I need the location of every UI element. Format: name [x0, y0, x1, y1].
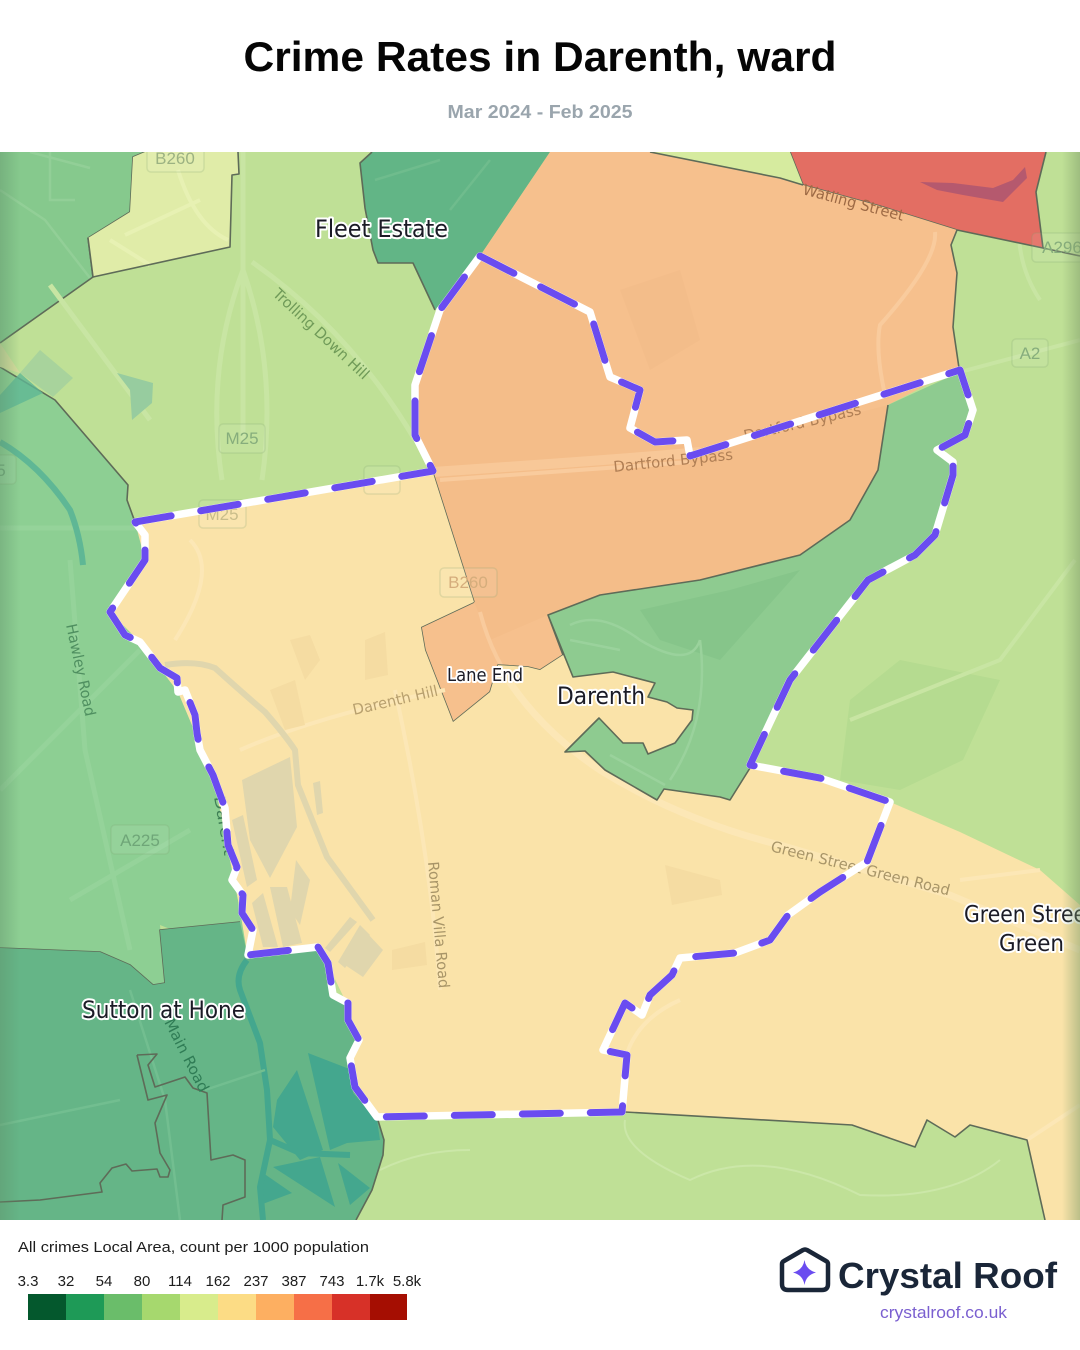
legend scale labels: 114 — [168, 1273, 192, 1290]
ward boundary: Darenth — [110, 256, 973, 1117]
road shields: M25 — [225, 429, 259, 448]
road names: Watling Street — [801, 180, 906, 225]
region: A2 corridor east — [840, 244, 1076, 790]
title: Crime Rates in Darenth, ward — [244, 33, 836, 80]
road names: Darenth Hill — [351, 682, 440, 719]
subtitle: date range: Mar 2024 - Feb 2025 — [448, 102, 632, 122]
logo: Crystal Roof — [782, 1250, 1058, 1322]
road shields: A2 — [1020, 344, 1040, 363]
road names: Dartford Bypass — [613, 446, 734, 476]
road shields: M25 — [205, 505, 239, 524]
legend scale labels: 1.7k — [356, 1273, 385, 1290]
region: southern green — [356, 1112, 1045, 1220]
road names: Roman Villa Road — [424, 861, 453, 989]
place labels: Fleet Estate — [315, 215, 448, 243]
place labels — [82, 215, 1080, 1024]
legend scale labels: 54 — [96, 1273, 112, 1290]
region: yellow Darenth main area — [110, 473, 1080, 1220]
legend — [18, 1239, 422, 1320]
road names: Trolling Down Hill — [269, 284, 373, 383]
website url: crystalroof.co.uk — [880, 1303, 1008, 1322]
road names: Darent — [210, 795, 238, 857]
road names: Dartford Bypass — [742, 400, 863, 445]
road names — [62, 180, 952, 1095]
legend scale labels: 162 — [205, 1273, 231, 1290]
legend scale labels: 80 — [134, 1273, 150, 1290]
icon: house with star — [782, 1250, 828, 1290]
legend title: All crimes Local Area, count per 1000 population — [18, 1239, 369, 1256]
legend scale labels: 32 — [58, 1273, 74, 1290]
road names: Green Street Green Road — [769, 837, 952, 899]
road shields: B260 — [448, 573, 488, 592]
road shields — [0, 144, 1080, 854]
place labels: Sutton at Hone — [82, 996, 245, 1024]
region: Fleet Estate dark green — [360, 152, 550, 310]
place labels: Darenth — [557, 682, 645, 710]
region: north-centre farmland details — [0, 152, 415, 480]
road names: Main Road — [160, 1016, 213, 1095]
legend colour ramp — [28, 1294, 407, 1320]
region: west medium green — [0, 367, 248, 985]
region: orange Dartford area — [415, 152, 959, 722]
legend scale labels: 743 — [319, 1273, 345, 1290]
region: pale strip north of Watling Street — [650, 152, 803, 185]
region: upper-left medium green — [0, 152, 145, 343]
place labels: Green — [999, 931, 1064, 957]
legend scale labels: 387 — [281, 1273, 307, 1290]
legend scale labels: 5.8k — [393, 1273, 422, 1290]
region: Sutton at Hone dark green — [0, 922, 384, 1220]
region: pale yellow-green estate — [88, 152, 239, 277]
legend scale labels: 237 — [243, 1273, 269, 1290]
road names: Hawley Road — [62, 622, 99, 718]
legend scale labels — [18, 1273, 422, 1290]
wordmark: Crystal Roof — [838, 1255, 1058, 1296]
place labels: Lane End — [447, 665, 523, 686]
region: red north-east area — [790, 152, 1080, 256]
region: Darenth green valley — [548, 372, 973, 800]
legend scale labels: 3.3 — [18, 1273, 38, 1290]
road shields: A225 — [120, 831, 160, 850]
road shields: B260 — [155, 149, 195, 168]
industrial and lake areas — [232, 757, 383, 977]
map edge vignette — [0, 152, 1080, 1220]
map — [0, 144, 1080, 1220]
